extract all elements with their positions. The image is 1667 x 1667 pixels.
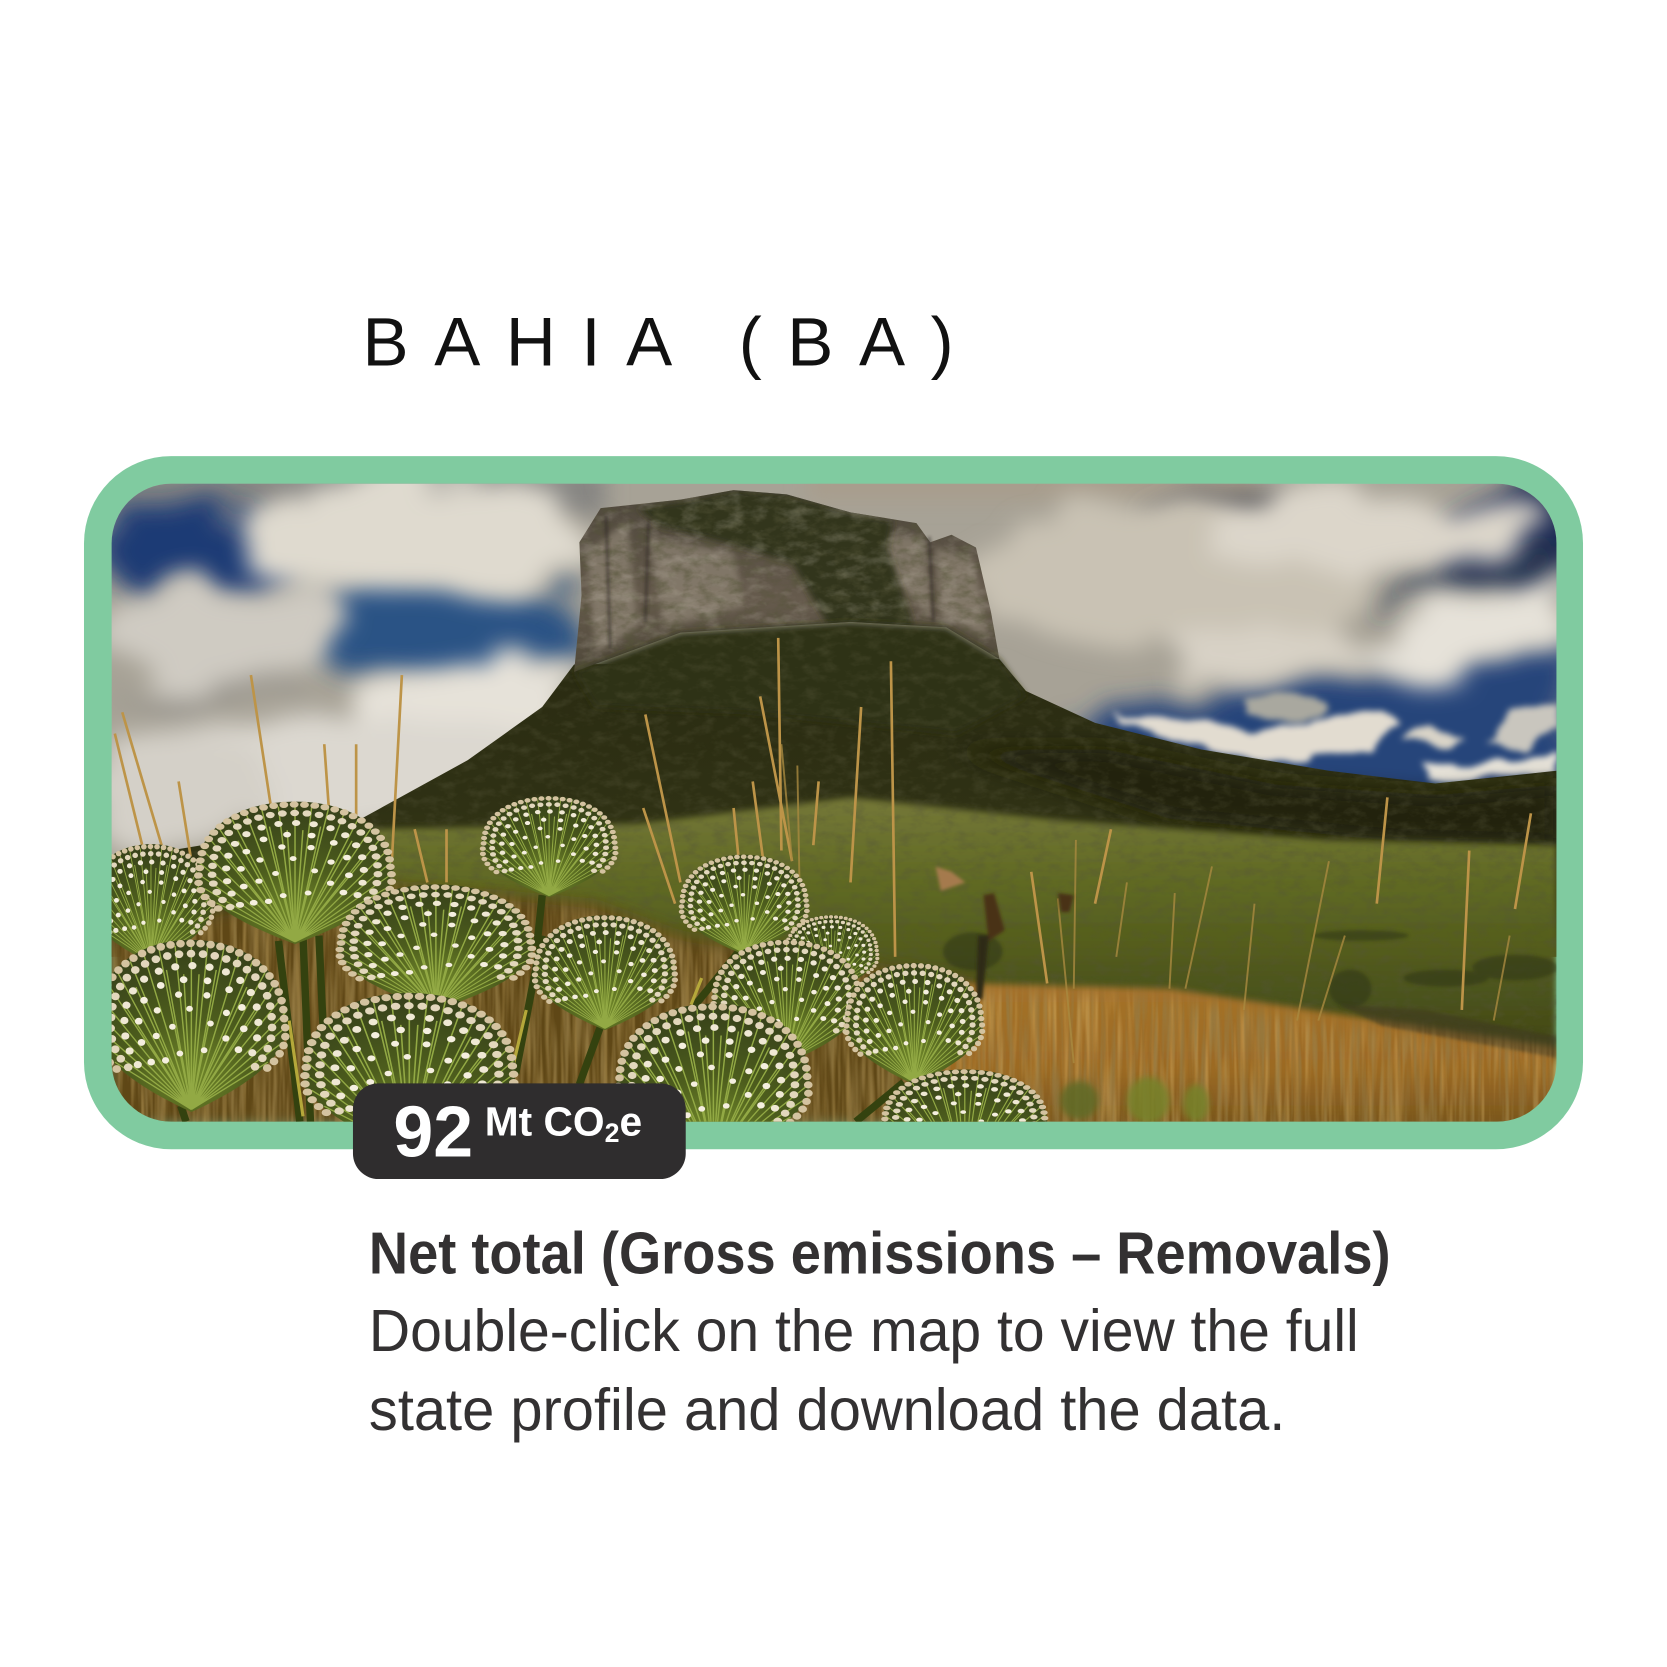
unit: 2 xyxy=(605,1118,619,1148)
flower: bottom right xyxy=(881,1069,1048,1122)
flower: right cluster outer xyxy=(845,963,983,1084)
dry golden grass xyxy=(936,983,1556,1127)
grass texture xyxy=(112,882,1556,1127)
emissions badge xyxy=(353,1083,686,1179)
flower: bottom centre xyxy=(615,1004,813,1122)
dark rocks xyxy=(1340,1005,1556,1058)
title: BAHIA (BA) xyxy=(363,303,954,381)
brown ground under flowers xyxy=(106,882,978,1127)
flower: large upper left xyxy=(197,802,393,944)
terrain mottling xyxy=(194,628,1556,1036)
caption body: Double-click on the map to view the full xyxy=(369,1297,1359,1364)
mountain slope xyxy=(106,659,1556,957)
meadow shrubs xyxy=(943,930,1557,1008)
flower: upper right xyxy=(680,855,808,955)
flower: lower left xyxy=(96,940,287,1112)
flower: middle centre xyxy=(338,885,534,1010)
caption body xyxy=(369,1297,1359,1443)
value: 92 xyxy=(393,1093,473,1173)
caption body: state profile and download the data. xyxy=(369,1376,1285,1443)
infographic canvas xyxy=(84,316,1583,1442)
flower: back right xyxy=(786,915,880,979)
photo: Morro do Pai Inácio landscape xyxy=(112,484,1556,1122)
bold caption heading: Net total (Gross emissions – Removals) xyxy=(369,1220,1391,1287)
flower: centre right of stem xyxy=(534,915,676,1030)
rock summit xyxy=(574,489,999,675)
photo frame xyxy=(84,456,1583,1149)
sky xyxy=(112,484,1556,854)
distant dark ridge xyxy=(957,750,1556,845)
flower: lower centre-left xyxy=(300,992,518,1122)
flower: far left xyxy=(112,844,216,954)
flower: right cluster centre xyxy=(712,940,861,1063)
unit: Mt CO xyxy=(485,1098,604,1144)
slope green wash xyxy=(574,620,1028,692)
grass behind flowers xyxy=(115,638,1531,1010)
flower stems xyxy=(181,895,904,1122)
green meadow xyxy=(361,797,1556,1063)
unit: e xyxy=(619,1098,642,1144)
bottom shrubs xyxy=(1060,1077,1209,1124)
flower: upper centre xyxy=(482,796,617,897)
seed heads xyxy=(936,866,1074,999)
